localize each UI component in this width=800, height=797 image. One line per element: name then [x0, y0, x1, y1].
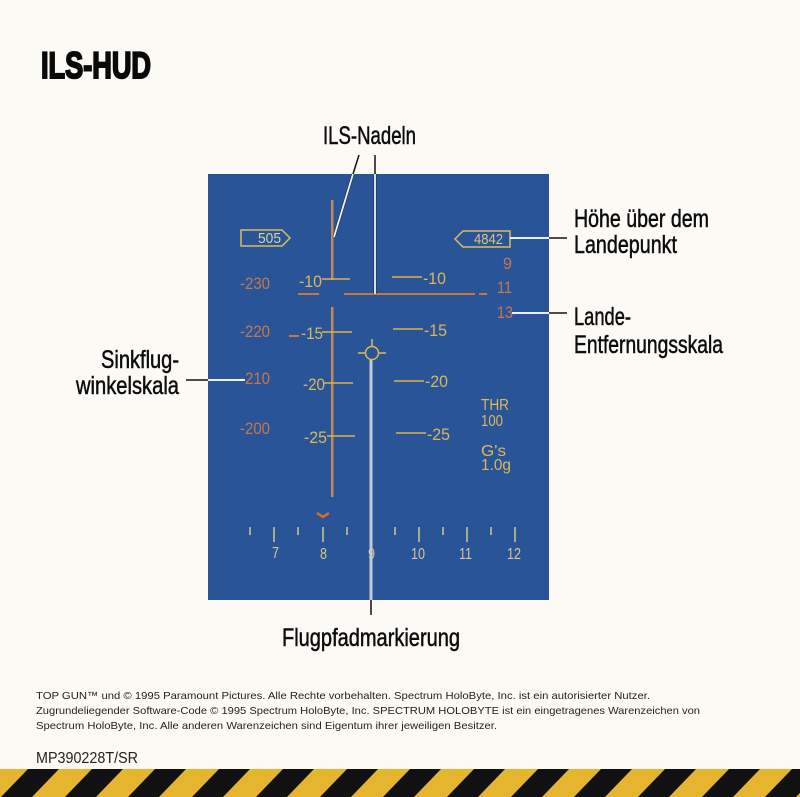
speed box: 505 [258, 230, 281, 247]
pitch ladder left: -15 [301, 324, 323, 343]
title: ILS-HUD [41, 45, 151, 86]
heading scale: 7 [272, 545, 279, 562]
copyright text: Spectrum HoloByte, Inc. Alle anderen Warenzeichen sind Eigentum ihrer jeweiligen Besitzer. [36, 720, 497, 732]
copyright text: Zugrundeliegender Software-Code © 1995 Spectrum HoloByte, Inc. SPECTRUM HOLOBYTE ist ein eingetragenes Warenzeichen von [36, 705, 700, 717]
throttle and g readout: G's [481, 443, 506, 460]
heading scale: 9 [368, 546, 375, 563]
speed box [241, 230, 290, 247]
callout: Höhe über dem Landepunkt: Höhe über dem [574, 205, 709, 233]
heading scale: 11 [459, 546, 472, 563]
descent angle scale: -220 [240, 322, 270, 341]
throttle and g readout: 100 [481, 413, 503, 430]
pitch ladder right: -10 [423, 269, 446, 288]
heading scale [250, 527, 521, 563]
throttle and g readout: THR [481, 397, 509, 414]
pitch ladder right: -25 [427, 425, 450, 444]
pitch ladder left: -25 [304, 428, 327, 447]
callout: ILS-Nadeln [323, 122, 416, 294]
pitch ladder left [299, 272, 355, 447]
descent angle scale: -200 [240, 419, 270, 438]
panel: HUD display [208, 174, 549, 600]
callout: Höhe über dem Landepunkt: Landepunkt [574, 231, 677, 259]
pitch ladder right: -15 [424, 321, 447, 340]
product code: MP390228T/SR [36, 750, 138, 767]
heading scale: 10 [411, 546, 425, 563]
descent angle scale: -230 [240, 274, 270, 293]
glideslope needle [289, 293, 487, 337]
pitch ladder right [392, 269, 450, 444]
altitude box [455, 231, 510, 248]
heading scale: 8 [320, 546, 327, 563]
descent angle scale [240, 274, 270, 438]
throttle and g readout: 1.0g [481, 457, 511, 474]
callout: Sinkflugwinkelskala: winkelskala [75, 372, 179, 400]
callout: Lande-Entfernungsskala [512, 303, 723, 359]
heading marker [317, 513, 329, 517]
callout: Höhe über dem Landepunkt [510, 205, 709, 259]
flight path marker symbol [358, 339, 386, 360]
copyright text [36, 690, 700, 732]
altitude box: 4842 [474, 231, 503, 248]
callout: Lande-Entfernungsskala: Entfernungsskala [574, 331, 723, 359]
landing distance scale: 9 [503, 254, 512, 273]
copyright text: TOP GUN™ und © 1995 Paramount Pictures. Alle Rechte vorbehalten. Spectrum HoloByte, Inc. ist ein autorisierter Nutzer. [36, 690, 650, 702]
pitch ladder left: -20 [303, 375, 325, 394]
landing distance scale [497, 254, 513, 322]
callout: Sinkflugwinkelskala [75, 346, 245, 400]
throttle and g readout [481, 397, 511, 474]
callout: Flugpfadmarkierung: Flugpfadmarkierung [282, 624, 460, 652]
localizer needle [331, 200, 334, 497]
callout: Sinkflugwinkelskala: Sinkflug- [101, 346, 179, 374]
callout: ILS-Nadeln: ILS-Nadeln [323, 122, 416, 150]
descent angle scale: -210 [240, 369, 270, 388]
pitch ladder right: -20 [425, 372, 448, 391]
heading scale: 12 [507, 546, 521, 563]
callout: Lande-Entfernungsskala: Lande- [574, 303, 631, 331]
landing distance scale: 13 [497, 303, 513, 322]
hazard stripe band [0, 769, 800, 797]
landing distance scale: 11 [497, 278, 512, 297]
pitch ladder left: -10 [299, 272, 322, 291]
